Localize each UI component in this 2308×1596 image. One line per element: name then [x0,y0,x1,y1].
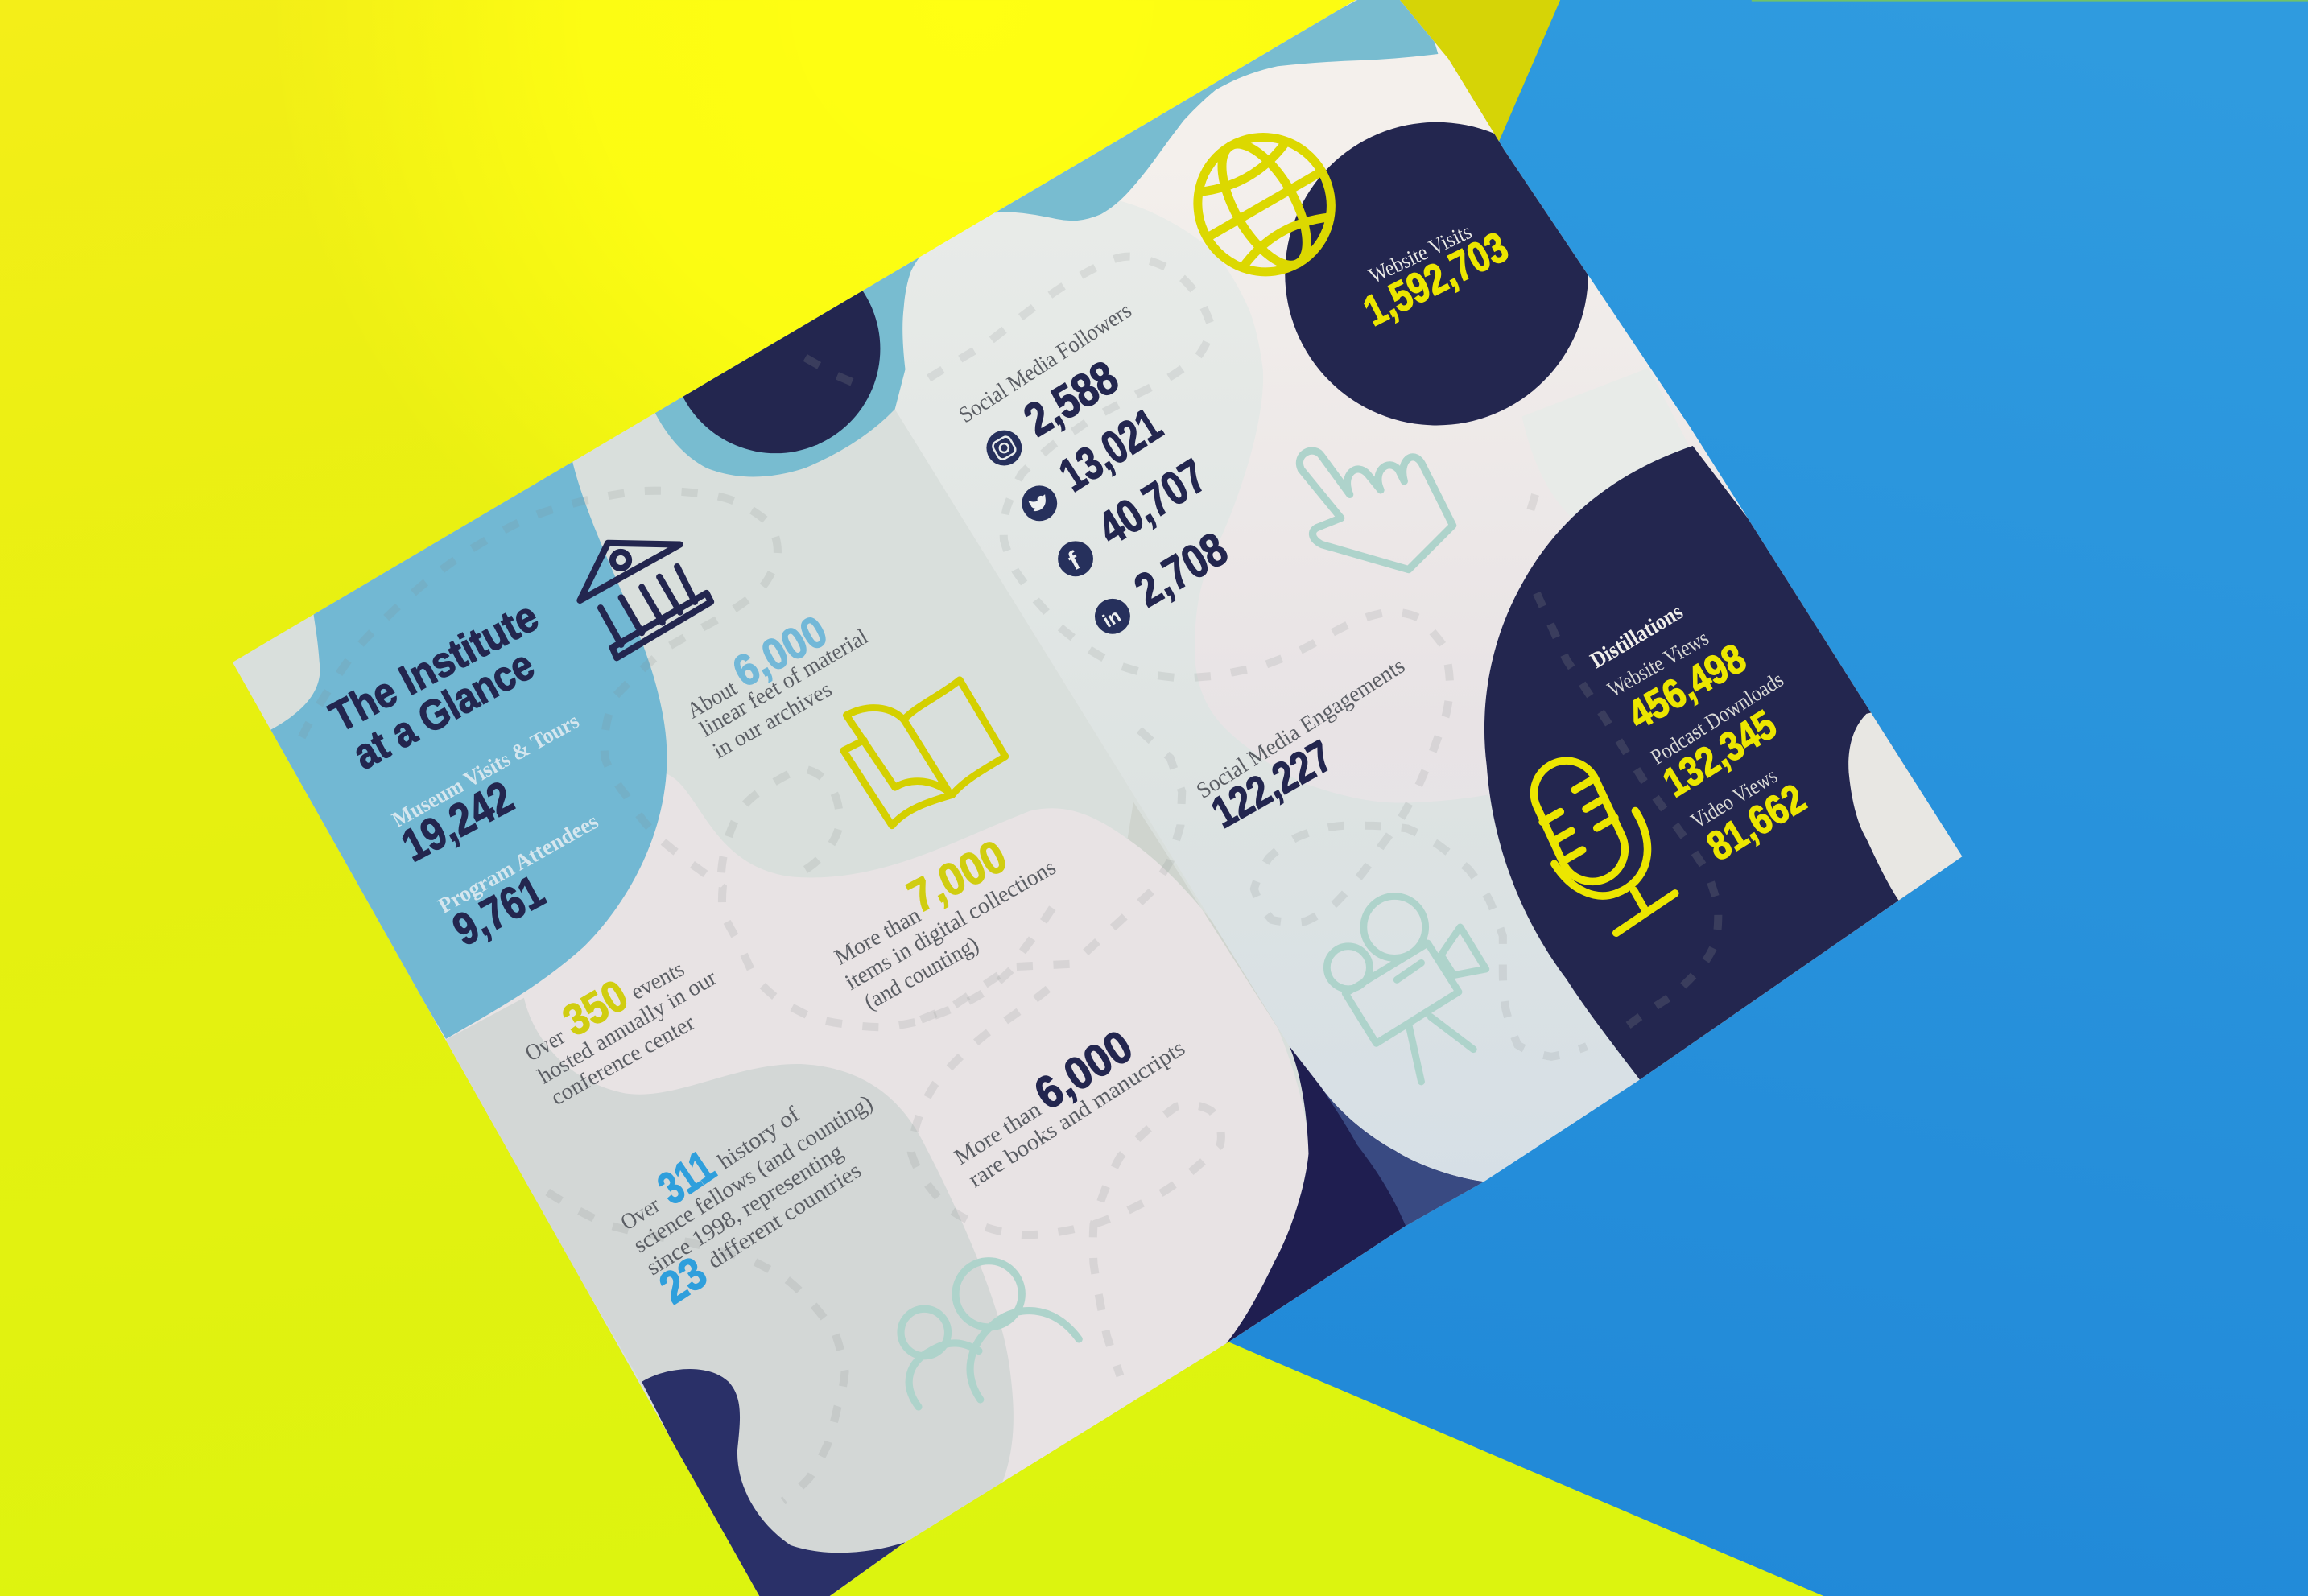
icon: movie camera [1327,897,1486,1082]
stat: 6,000 linear feet [683,605,873,764]
stat: facebook: f [1063,545,1085,575]
stat: 6,000 linear feet: linear feet of material [696,625,873,742]
panel: distillations navy blob [1484,446,1914,1082]
top edge highlight line [1752,0,2308,2]
title: at a Glance [345,641,542,779]
stat: twitter: 13,021 [1051,398,1171,501]
icon: pointing hand [1299,451,1453,570]
panel: white corner blob [1848,713,1963,901]
stat: 311 fellows and 23 countries: history of [713,1102,804,1174]
stat: 6,000 linear feet: in our archives [708,677,836,764]
stat: 6,000 linear feet: 6,000 [725,605,835,697]
stat: linkedin: 2,708 [1126,522,1237,617]
icon: open book [844,680,1005,826]
stat: distillations: Distillations [1586,600,1687,674]
stat: 6,000 rare books: rare books and manucripts [964,1036,1190,1193]
stat: facebook: 40,707 [1089,449,1216,555]
stat: instagram: 2,588 [1015,351,1127,447]
stat: website visits: Website Visits [1365,219,1475,288]
stat: program attendees: Program Attendees [434,809,602,918]
panel: navy fold [1226,1046,1484,1343]
stat: distillations [1586,600,1814,869]
panel: right page [895,0,1972,1182]
stat: 350 events: hosted annually in our [534,965,721,1089]
stat: 6,000 linear feet: About [683,675,741,724]
stat: distillations: 456,498 [1621,635,1753,738]
stat: instagram [986,351,1127,466]
stat: 7,000 digital items: More than [831,903,925,971]
stat: distillations: 132,345 [1655,701,1784,806]
stat: website visits: 1,592,703 [1356,223,1516,336]
icon: museum [580,543,711,658]
icon: microphone [1521,749,1675,933]
stat: 350 events: Over [521,1025,570,1066]
stat: 350 events: conference center [547,1010,700,1111]
stat: 7,000 digital items: 7,000 [900,831,1015,923]
stat: linkedin [1095,522,1237,634]
stat: social media engagements: 122,227 [1203,730,1340,838]
stat: museum visits: 19,242 [394,772,522,872]
stat: 311 fellows and 23 countries: 311 [650,1141,725,1215]
stat: 311 fellows and 23 countries: different countries [704,1158,866,1274]
panel: navy bottom-left blob [642,1369,905,1596]
icon: people [901,1261,1079,1407]
stat: 7,000 digital items: (and counting) [861,932,983,1016]
background: blue paper [1178,0,2308,1596]
panel: left page light blob [427,773,1308,1596]
panel: navy top blob [683,291,881,454]
panel: website visits circle [1285,122,1588,425]
icon: globe [1173,113,1356,296]
panel: spine shadow [1127,802,1280,1030]
stat: facebook [1058,449,1216,576]
stat: 311 fellows and 23 countries: Over [617,1193,665,1235]
stat: distillations: Video Views [1687,763,1782,833]
panel: right page small grey blob [1522,368,1690,519]
stat: 7,000 digital items: items in digital collections [841,855,1060,996]
stat: linkedin: in [1099,605,1125,633]
stat: 311 fellows and 23 countries: since 1998, representing [642,1140,848,1281]
panel: teal top band [633,0,1438,476]
title [322,592,546,779]
panel: blue fold patch [1320,1086,1484,1226]
stat: 350 events: events [627,956,688,1005]
dashed paths [302,257,1718,1501]
stat: distillations: 81,662 [1699,775,1814,869]
stat: 6,000 rare books: More than [950,1097,1046,1170]
stat: 6,000 rare books: 6,000 [1026,1021,1142,1120]
social media followers heading: Social Media Followers [955,299,1136,428]
panel: left page lower grey blob [442,998,1014,1596]
stat: twitter [1022,398,1171,521]
panel: right page grey blob [895,192,1663,1182]
stat: museum visits [388,708,583,872]
stat: 350 events: 350 [555,970,636,1045]
panel: left page teal blob [265,449,667,1039]
stat: social media engagements: Social Media Engagements [1192,654,1410,804]
stat: program attendees: 9,761 [445,866,553,956]
title: The Institute [322,592,546,741]
stat: museum visits: Museum Visits & Tours [388,708,583,832]
stat: 311 fellows and 23 countries: science fellows (and counting) [630,1091,877,1258]
stat: distillations: Podcast Downloads [1646,667,1788,769]
stat: distillations: Website Views [1604,625,1712,702]
stat: 311 fellows and 23 countries: 23 [651,1248,716,1314]
